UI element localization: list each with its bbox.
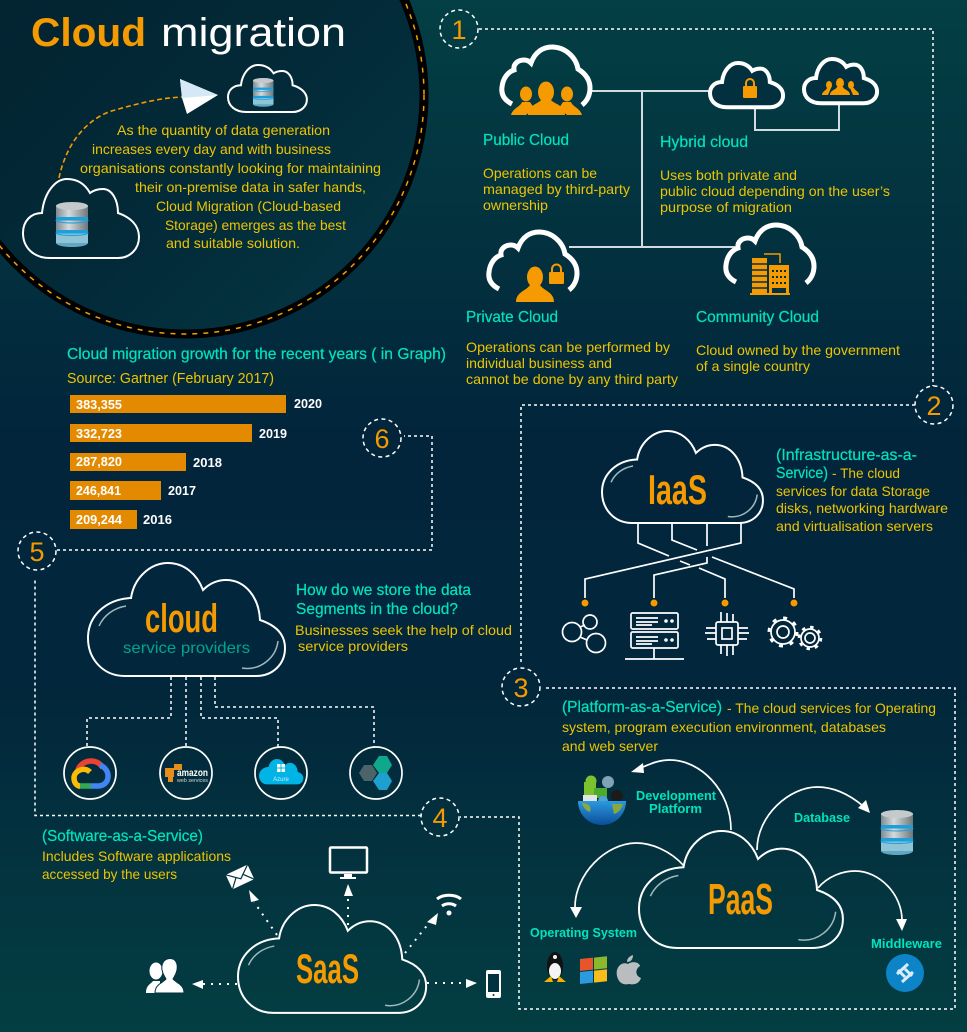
step number 5: [18, 532, 56, 570]
arrow: monitor: [344, 884, 353, 925]
bar 2016: [70, 510, 172, 529]
text: hybrid cloud: public cloud depending on the user’s: [660, 183, 890, 199]
arrow: mail: [249, 890, 277, 935]
step number 4: 4: [432, 803, 448, 833]
step number 3: 3: [513, 673, 529, 703]
intro text: Cloud Migration (Cloud-based: [156, 198, 341, 214]
bar 2020: [70, 395, 322, 413]
icon: community cloud: [726, 225, 814, 295]
heading: how do we store: How do we store the data: [296, 582, 471, 599]
label: development platform: [636, 789, 717, 816]
text: private cloud: Operations can be performed by: [466, 339, 670, 355]
panel: PaaS: [530, 699, 942, 992]
bar 2016: 209,244: [76, 513, 122, 527]
title: migration: [161, 11, 346, 55]
bar 2019: [70, 424, 287, 442]
text: PaaS definition: (Platform-as-a-Service): [562, 699, 722, 716]
step number 2: [915, 386, 953, 424]
heading: how do we store: Segments in the cloud?: [296, 601, 458, 618]
wire end dots: [581, 599, 798, 607]
icon: mail: [226, 865, 254, 889]
text: PaaS definition: [562, 699, 936, 754]
icon: network share: [562, 615, 606, 652]
intro text: their on-premise data in safer hands,: [135, 179, 366, 195]
step number 1: 1: [451, 15, 467, 45]
bar 2016: 2016: [143, 513, 172, 527]
cloud: service providers: cloud: [145, 597, 218, 641]
intro text: Storage) emerges as the best: [165, 217, 346, 233]
bar 2018: [70, 453, 222, 471]
icon: monitor: [330, 848, 367, 879]
text: hybrid cloud: purpose of migration: [660, 199, 792, 215]
icon: amazon web services: web services: [176, 778, 208, 784]
icon: hybrid clouds: [710, 59, 877, 107]
cloud: IaaS: [602, 431, 763, 523]
step number 6: 6: [374, 424, 390, 454]
text: IaaS definition: and virtualisation servers: [776, 518, 933, 534]
cloud: SaaS: SaaS: [296, 945, 359, 992]
text: IaaS definition: - The cloud: [832, 465, 900, 481]
icon: amazon web services: amazon: [177, 768, 208, 779]
icon: users: [146, 958, 184, 993]
cloud: SaaS: [238, 905, 426, 1013]
label: middleware: Middleware: [871, 937, 942, 951]
text: businesses seek help: service providers: [298, 638, 408, 654]
panel: cloud types: [466, 47, 900, 387]
step number 4: [421, 798, 459, 836]
bar 2019: 2019: [259, 427, 287, 441]
bar 2020: 2020: [294, 397, 322, 411]
icon: public cloud: [502, 47, 590, 115]
panel: IaaS: [562, 431, 948, 659]
intro text: [80, 122, 381, 251]
icon: phone: [486, 970, 501, 998]
text: IaaS definition: (Infrastructure-as-a-: [776, 447, 917, 464]
text: businesses seek help: [295, 622, 512, 654]
icon: azure: [255, 747, 307, 799]
text: SaaS definition: Includes Software applications: [42, 848, 231, 864]
icon: apple: [617, 955, 641, 984]
text: businesses seek help: Businesses seek the help of cloud: [295, 622, 512, 638]
icon: windows: [580, 956, 607, 984]
arrow: database: [757, 787, 870, 850]
text: private cloud: [466, 339, 678, 387]
bar 2018: 2018: [193, 456, 222, 470]
icon: target cloud with database: [228, 65, 307, 112]
connector lines: [569, 91, 839, 247]
intro text: organisations constantly looking for maintaining: [80, 160, 381, 176]
text: IaaS definition: [776, 447, 948, 534]
icon: azure: Azure: [273, 777, 289, 783]
bar 2019: 332,723: [76, 427, 122, 441]
icon: chip: [705, 612, 749, 656]
icon: private cloud: [489, 232, 577, 302]
text: IaaS definition: disks, networking hardware: [776, 500, 948, 516]
panel: intro circle: [0, 0, 424, 334]
chart heading: Cloud migration growth for the recent years ( in Graph): [67, 346, 446, 363]
heading: how do we store: [296, 582, 471, 618]
step number 6: [363, 419, 401, 457]
label: public cloud: Public Cloud: [483, 132, 569, 149]
text: PaaS definition: - The cloud services for Operating: [727, 700, 936, 716]
cloud: service providers: [88, 563, 285, 676]
text: community cloud: [696, 342, 900, 374]
arrow: users: [192, 980, 237, 989]
text: PaaS definition: and web server: [562, 738, 658, 754]
intro text: and suitable solution.: [166, 235, 300, 251]
label: development platform: Development: [636, 789, 717, 803]
icon: database: [881, 810, 913, 855]
text: SaaS definition: (Software-as-a-Service): [42, 828, 203, 845]
text: public cloud: managed by third-party: [483, 181, 630, 197]
text: PaaS definition: system, program execution environment, databases: [562, 719, 886, 735]
text: SaaS definition: [42, 828, 231, 882]
label: private cloud: Private Cloud: [466, 309, 558, 326]
cloud: IaaS: IaaS: [648, 466, 707, 513]
text: private cloud: cannot be done by any third party: [466, 371, 678, 387]
text: IaaS definition: Service): [776, 465, 828, 482]
icon: middleware: [886, 954, 924, 992]
icon: amazon web services: [160, 747, 212, 799]
arrow: middleware: [818, 871, 907, 931]
step number 3: [502, 668, 540, 706]
arrow: wifi: [405, 913, 438, 953]
icon: hexagon provider: [350, 747, 402, 799]
icon: server: [625, 613, 684, 659]
arrow: phone: [427, 979, 477, 988]
label: community cloud: Community Cloud: [696, 309, 819, 326]
text: IaaS definition: services for data Storage: [776, 483, 930, 499]
provider connectors: [87, 677, 374, 747]
bar 2017: [70, 481, 196, 500]
text: SaaS definition: accessed by the users: [42, 866, 177, 882]
panel: growth bar chart: [67, 346, 446, 529]
bar 2017: 2017: [168, 484, 196, 498]
icon: gears: [769, 618, 821, 649]
label: operating system: Operating System: [530, 926, 637, 940]
bar 2017: 246,841: [76, 484, 121, 498]
cloud: PaaS: [639, 831, 843, 948]
title: Cloud: [31, 11, 146, 55]
icon: source cloud with database: [23, 179, 139, 258]
crossing wires: [585, 523, 794, 598]
step number 1: [440, 10, 478, 48]
bar 2020: 383,355: [76, 398, 122, 412]
text: public cloud: [483, 165, 630, 213]
text: public cloud: Operations can be: [483, 165, 597, 181]
arrow: development platform: [631, 760, 731, 830]
text: hybrid cloud: Uses both private and: [660, 167, 797, 183]
migration path arrow: [59, 79, 218, 178]
text: private cloud: individual business and: [466, 355, 612, 371]
text: community cloud: Cloud owned by the government: [696, 342, 900, 358]
icon: development platform globe: [578, 776, 626, 825]
text: hybrid cloud: [660, 167, 890, 215]
text: community cloud: of a single country: [696, 358, 810, 374]
bar 2018: 287,820: [76, 455, 122, 469]
chart source: Source: Gartner (February 2017): [67, 371, 274, 387]
arrow: operating system: [570, 843, 684, 918]
cloud: service providers: service providers: [123, 640, 250, 657]
label: database: Database: [794, 811, 850, 825]
intro text: As the quantity of data generation: [117, 122, 330, 138]
intro text: increases every day and with business: [92, 141, 331, 157]
cloud: PaaS: PaaS: [708, 875, 773, 924]
step number 5: 5: [29, 537, 45, 567]
panel: SaaS: [42, 828, 501, 1013]
text: public cloud: ownership: [483, 197, 548, 213]
icon: linux: [544, 952, 566, 982]
icon: wifi: [437, 895, 461, 916]
title: [31, 11, 346, 55]
label: hybrid cloud: Hybrid cloud: [660, 134, 748, 151]
step number 2: 2: [926, 391, 942, 421]
panel: cloud service providers: [64, 563, 512, 799]
label: development platform: Platform: [649, 802, 702, 816]
icon: google cloud: [64, 747, 116, 799]
